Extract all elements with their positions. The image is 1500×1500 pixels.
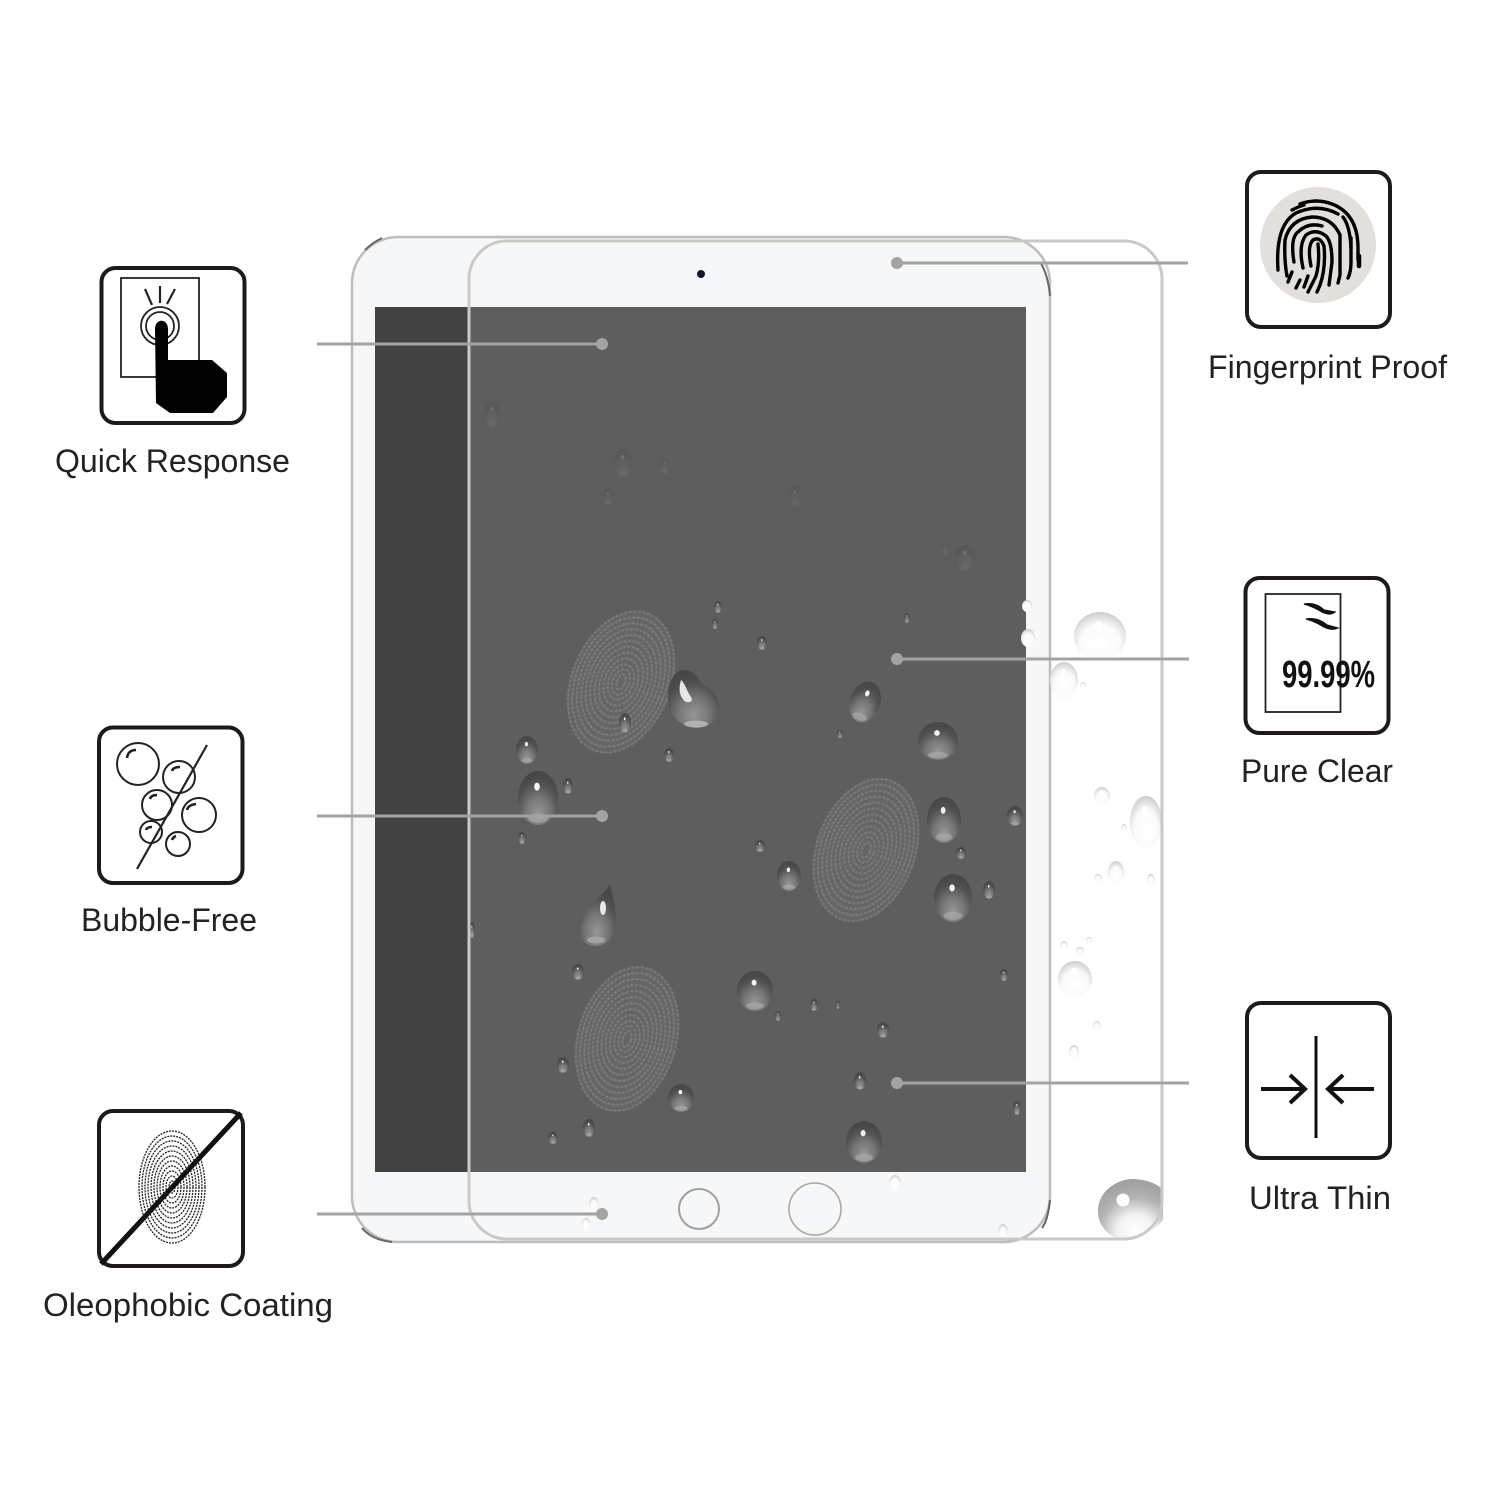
screen dark uncovered part <box>375 307 469 1172</box>
label: bubble-free: Bubble-Free <box>81 902 257 938</box>
label: pure clear: Pure Clear <box>1241 753 1393 789</box>
water drops on screen <box>469 401 1023 1163</box>
label: quick response: Quick Response <box>55 443 290 479</box>
icon: 99.99% transparency: 99.99% <box>1282 654 1375 696</box>
fingerprint top <box>548 596 694 768</box>
feature: pure clear <box>1241 578 1393 789</box>
leader: ultra thin <box>891 1077 1189 1089</box>
icon: 99.99% transparency <box>1246 578 1388 733</box>
screen covered by glass <box>468 307 1026 1172</box>
feature: bubble-free <box>81 728 257 938</box>
leader: oleophobic coating <box>317 1208 608 1220</box>
tablet <box>352 237 1050 1242</box>
icon: fingerprint <box>1247 172 1390 327</box>
feature: quick response <box>55 268 290 479</box>
tablet body <box>352 237 1050 1242</box>
fingerprint right <box>795 764 937 936</box>
tablet metal edge highlights <box>362 238 1050 1242</box>
leader: bubble-free <box>317 810 608 822</box>
feature: ultra thin <box>1247 1003 1391 1216</box>
leader: pure clear <box>891 653 1189 665</box>
feature: fingerprint proof <box>1208 172 1447 385</box>
icon: bubbles <box>99 728 242 883</box>
label: oleophobic coating: Oleophobic Coating <box>43 1287 333 1323</box>
icon: touch <box>102 268 244 423</box>
label: ultra thin: Ultra Thin <box>1249 1180 1391 1216</box>
water drops outside the tablet <box>582 600 1163 1240</box>
leader: quick response <box>317 338 608 350</box>
tablet home button <box>679 1189 719 1229</box>
heart-shaped drop <box>668 670 719 728</box>
fingerprints on screen <box>548 596 937 1123</box>
leader lines <box>317 257 1189 1220</box>
icon: arrows <box>1247 1003 1390 1158</box>
second home button ring on glass <box>789 1183 841 1235</box>
leader: fingerprint proof <box>891 257 1188 269</box>
camera <box>697 270 705 278</box>
fingerprint bottom <box>560 955 694 1123</box>
glass screen protector outline <box>469 241 1162 1239</box>
teardrop <box>578 885 616 946</box>
icon: crossed fingerprint <box>99 1111 243 1266</box>
label: fingerprint proof: Fingerprint Proof <box>1208 349 1447 385</box>
feature: oleophobic coating <box>43 1111 333 1323</box>
